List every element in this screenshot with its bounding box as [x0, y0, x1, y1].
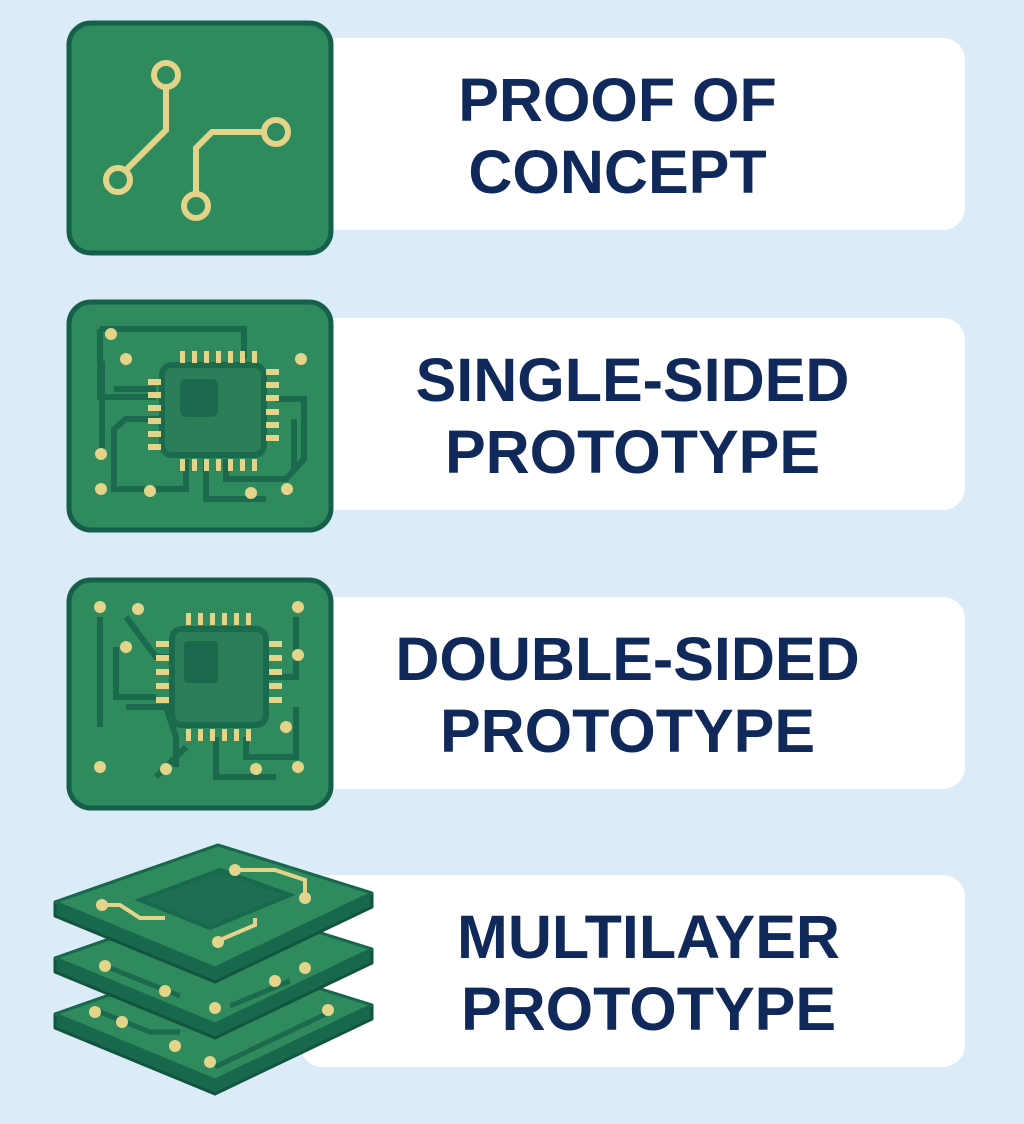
heading: proof of concept: PROOF OF: [458, 66, 777, 134]
heading: single-sided: [416, 346, 849, 486]
icon: stacked boards: [53, 844, 374, 1096]
heading: double-sided: [395, 625, 860, 765]
heading: double-sided: PROTOTYPE: [440, 697, 815, 765]
heading: multilayer: PROTOTYPE: [461, 975, 836, 1043]
icon: double-sided board: [66, 578, 334, 810]
panel: single-sided: [300, 318, 965, 510]
heading: proof of concept: CONCEPT: [468, 138, 767, 206]
heading: multilayer: [457, 903, 840, 1043]
panel: double-sided: [300, 597, 965, 789]
heading: proof of concept: [458, 66, 777, 206]
heading: double-sided: DOUBLE-SIDED: [395, 625, 860, 693]
icon: single-sided board: [66, 300, 334, 532]
heading: multilayer: MULTILAYER: [457, 903, 840, 971]
heading: single-sided: PROTOTYPE: [445, 418, 820, 486]
panel: multilayer: [300, 875, 965, 1067]
icon: simple traces board: [66, 20, 334, 256]
heading: single-sided: SINGLE-SIDED: [416, 346, 849, 414]
panel: proof of concept: [300, 38, 965, 230]
